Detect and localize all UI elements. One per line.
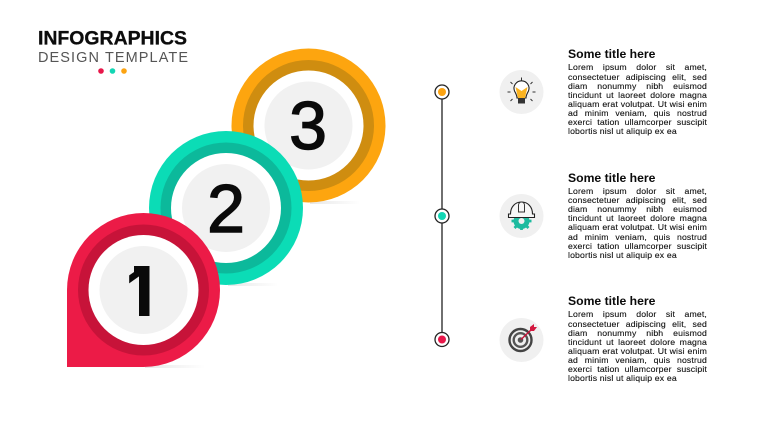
block 2 body: aliquam erat volutpat. Ut wisi enim	[568, 222, 707, 232]
block 2 heading: Some title here	[568, 170, 655, 184]
title dots	[98, 68, 127, 74]
block 1 body: consectetuer adipiscing elit, sed	[568, 72, 707, 82]
block 3 body: Lorem ipsum dolor sit amet,	[568, 309, 707, 319]
timeline marker orange	[435, 85, 449, 99]
block 2 body: Lorem ipsum dolor sit amet,	[568, 186, 707, 196]
timeline	[435, 85, 449, 346]
text block 1	[568, 47, 707, 136]
text block 3	[568, 294, 707, 383]
block 2 body: ad minim veniam, quis nostrud	[568, 232, 707, 242]
block 3 body: tincidunt ut laoreet dolore magna	[568, 337, 707, 347]
block 1 body: ad minim veniam, quis nostrud	[568, 108, 707, 118]
timeline marker red	[435, 332, 449, 346]
block 2 body: exerci tation ullamcorper suscipit	[568, 241, 707, 251]
block 1 body: aliquam erat volutpat. Ut wisi enim	[568, 99, 707, 109]
block 3 body	[568, 309, 707, 383]
block 2 body	[568, 186, 707, 260]
timeline marker teal	[435, 209, 449, 223]
block 2 body: tincidunt ut laoreet dolore magna	[568, 213, 707, 223]
block 1 body: Lorem ipsum dolor sit amet,	[568, 62, 707, 72]
block 1 body: tincidunt ut laoreet dolore magna	[568, 90, 707, 100]
circle 2 teal: 2	[207, 171, 245, 247]
block 1 body: exerci tation ullamcorper suscipit	[568, 117, 707, 127]
pin 1 red	[67, 213, 220, 368]
title: DESIGN TEMPLATE	[38, 50, 188, 66]
block 2 body: diam nonummy nibh euismod	[568, 204, 707, 214]
block 3 heading: Some title here	[568, 294, 655, 308]
icon: target and arrow	[500, 318, 544, 362]
title: INFOGRAPHICS	[38, 28, 187, 50]
circle 3 orange	[232, 48, 386, 204]
icon: light bulb	[500, 70, 544, 114]
block 3 body: exerci tation ullamcorper suscipit	[568, 364, 707, 374]
block 3 body: diam nonummy nibh euismod	[568, 328, 707, 338]
block 3 body: consectetuer adipiscing elit, sed	[568, 319, 707, 329]
block 2 body: lobortis nisl ut aliquip ex ea	[568, 250, 677, 260]
title	[38, 28, 188, 66]
block 3 body: aliquam erat volutpat. Ut wisi enim	[568, 346, 707, 356]
pin 1 red: 1	[124, 254, 161, 330]
block 1 heading: Some title here	[568, 47, 655, 61]
block 1 body	[568, 62, 707, 136]
block 3 body: ad minim veniam, quis nostrud	[568, 355, 707, 365]
block 1 body: lobortis nisl ut aliquip ex ea	[568, 126, 677, 136]
block 1 body: diam nonummy nibh euismod	[568, 81, 707, 91]
circle 2 teal	[149, 131, 303, 286]
block 3 body: lobortis nisl ut aliquip ex ea	[568, 373, 677, 383]
circle 3 orange: 3	[289, 88, 327, 164]
block 2 body: consectetuer adipiscing elit, sed	[568, 195, 707, 205]
icon: helmet and gear	[500, 194, 544, 238]
text block 2	[568, 170, 707, 260]
